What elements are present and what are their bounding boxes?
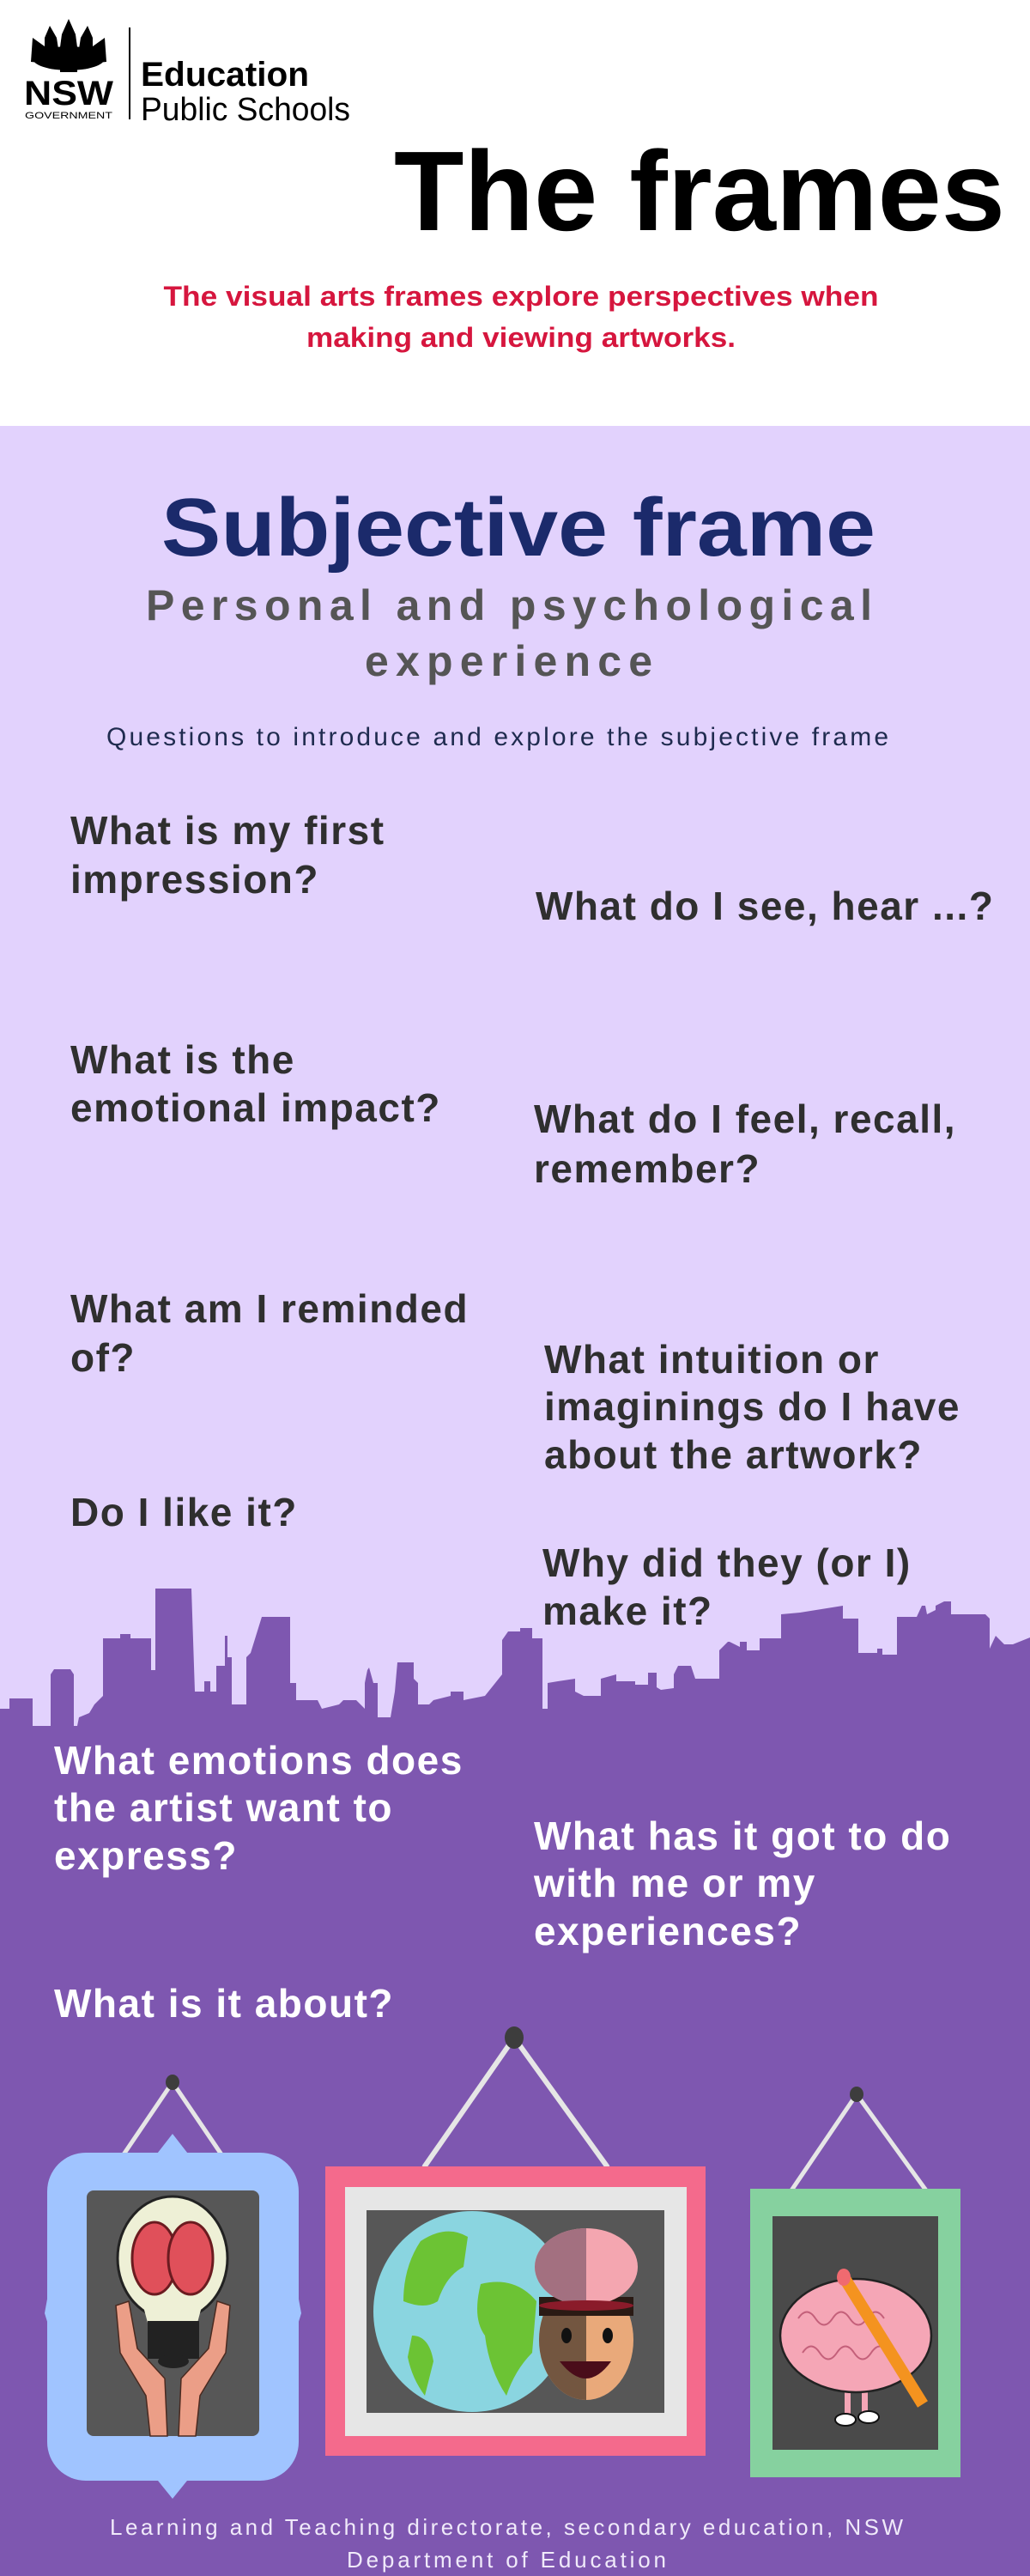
questions: right column: remember? <box>534 1146 760 1191</box>
questions: left column: What is my first <box>70 808 385 853</box>
heading: Subjective frame: Subjective frame <box>161 482 876 574</box>
questions: right column: Why did they (or I) <box>542 1540 912 1585</box>
questions: white on skyline: the artist want to <box>54 1785 393 1830</box>
subheading: experience <box>365 637 652 685</box>
picture frame 1: bulb and hands <box>45 2075 301 2499</box>
questions: left column: What is the <box>70 1037 295 1082</box>
questions: left column: impression? <box>70 857 319 902</box>
footer credit <box>110 2514 903 2573</box>
questions: right column: What do I see, hear ...? <box>536 884 994 928</box>
questions: right column: imaginings do I have <box>544 1384 960 1429</box>
questions: white on skyline <box>54 1738 951 2026</box>
questions: left column <box>70 808 469 1534</box>
subtitle <box>163 281 879 353</box>
questions: white on skyline: express? <box>54 1833 238 1878</box>
questions: right column: What intuition or <box>544 1337 880 1382</box>
logo: NSW Education Public Schools: GOVERNMENT <box>25 111 112 121</box>
logo: NSW Education Public Schools: NSW <box>24 75 113 112</box>
questions: white on skyline: with me or my <box>533 1861 816 1905</box>
footer credit: Learning and Teaching directorate, secondary education, NSW <box>110 2514 903 2540</box>
questions: white on skyline: What has it got to do <box>534 1814 951 1858</box>
questions: white on skyline: What emotions does <box>54 1738 464 1783</box>
questions: right column: about the artwork? <box>544 1432 923 1477</box>
logo: NSW Education Public Schools <box>24 19 350 128</box>
questions: left column: of? <box>70 1335 136 1380</box>
logo: NSW Education Public Schools: Education <box>141 56 309 94</box>
skyline silhouette <box>0 1589 1030 2576</box>
icon: waratah <box>31 19 106 72</box>
footer credit: Department of Education <box>347 2547 666 2573</box>
questions: left column: Do I like it? <box>70 1490 298 1534</box>
questions: right column <box>534 884 994 1633</box>
questions: right column: What do I feel, recall, <box>534 1097 956 1141</box>
subtitle: making and viewing artworks. <box>306 322 736 353</box>
intro text: Questions to introduce and explore the subjective frame <box>106 723 888 751</box>
subheading <box>146 581 872 685</box>
picture frame 3: brain with pencil <box>750 2087 960 2477</box>
questions: white on skyline: experiences? <box>534 1909 802 1953</box>
logo: NSW Education Public Schools: Public Schools <box>141 92 350 128</box>
questions: left column: emotional impact? <box>70 1085 441 1130</box>
picture frame 2: globe and face <box>325 2026 706 2456</box>
title: The frames <box>394 128 1005 254</box>
questions: white on skyline: What is it about? <box>54 1981 394 2026</box>
subheading: Personal and psychological <box>146 581 872 629</box>
questions: left column: What am I reminded <box>70 1286 469 1331</box>
questions: right column: make it? <box>542 1589 713 1633</box>
subtitle: The visual arts frames explore perspectives when <box>163 281 879 312</box>
